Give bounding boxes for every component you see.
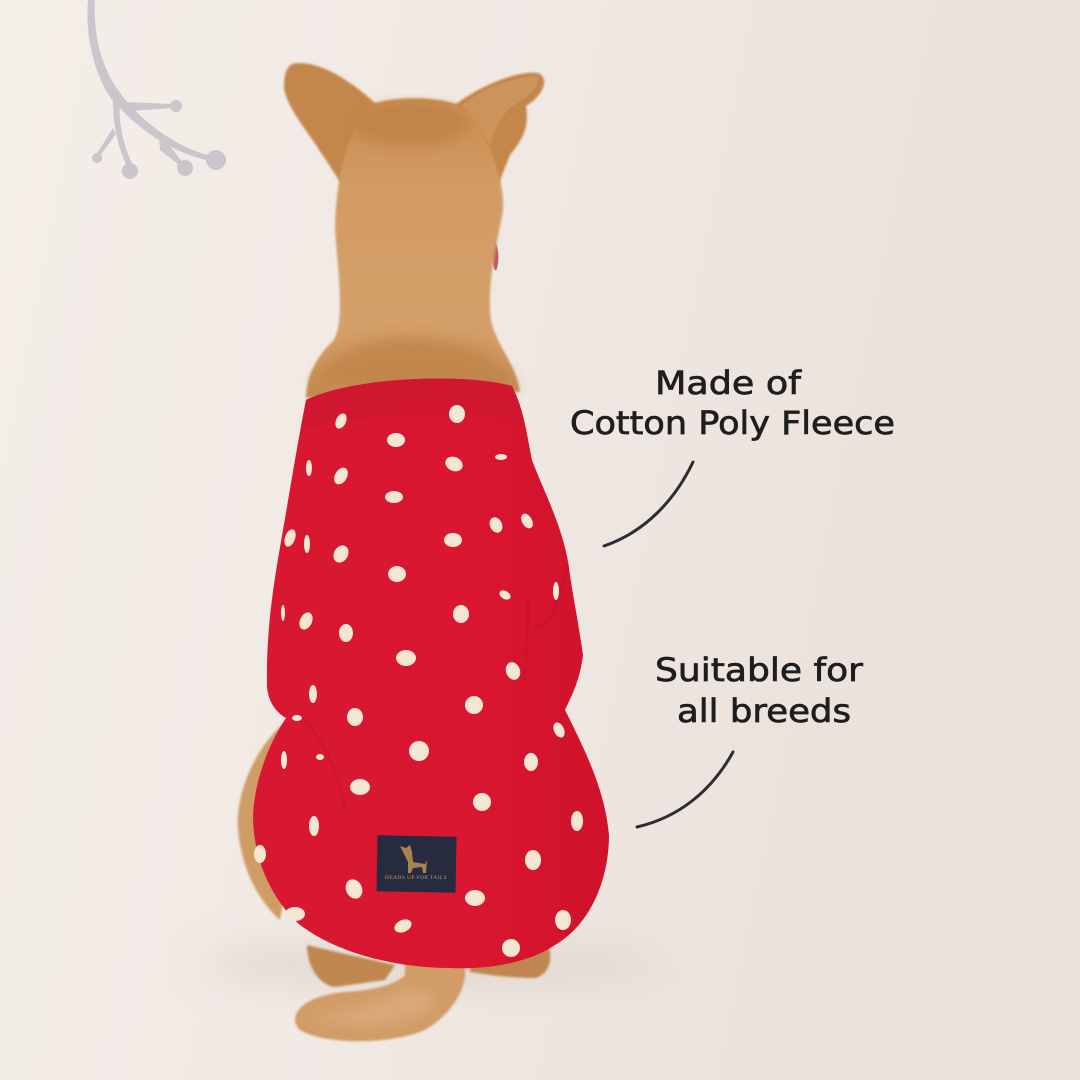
icon: dog tongue — [492, 238, 498, 271]
callout: all breeds — [637, 651, 873, 827]
neck fold shade — [312, 338, 517, 392]
dog left ear — [284, 63, 380, 190]
callout text: Suitable for — [655, 651, 864, 689]
dog neck and head — [306, 98, 520, 398]
callout: cotton poly fleece — [570, 364, 895, 546]
shirt with polka dots — [253, 378, 609, 968]
brand patch — [377, 835, 456, 893]
arrow: breeds curve — [637, 752, 733, 827]
tail — [295, 962, 465, 1041]
callout text: Cotton Poly Fleece — [570, 404, 895, 442]
dog hip behind shirt — [238, 722, 300, 920]
dog hind paws — [307, 945, 550, 987]
icon: brand dog — [400, 845, 427, 873]
arrow: fleece curve — [604, 462, 693, 546]
dog illustration — [238, 63, 609, 1041]
shirt collar ribbing — [302, 378, 525, 432]
tail fur highlight — [310, 990, 435, 1025]
floor shadow — [200, 941, 660, 989]
shirt arm fold — [300, 570, 567, 810]
head crown shade — [352, 103, 468, 147]
brand text: HEADS UP FOR TAILS — [385, 875, 447, 881]
dog right ear — [450, 73, 544, 205]
callout text: Made of — [655, 364, 802, 402]
dog ear inner shade — [462, 76, 538, 145]
callout text: all breeds — [677, 692, 851, 730]
shirt body — [253, 378, 609, 968]
icon: branch decoration — [87, 0, 226, 179]
polka dots — [254, 405, 583, 957]
